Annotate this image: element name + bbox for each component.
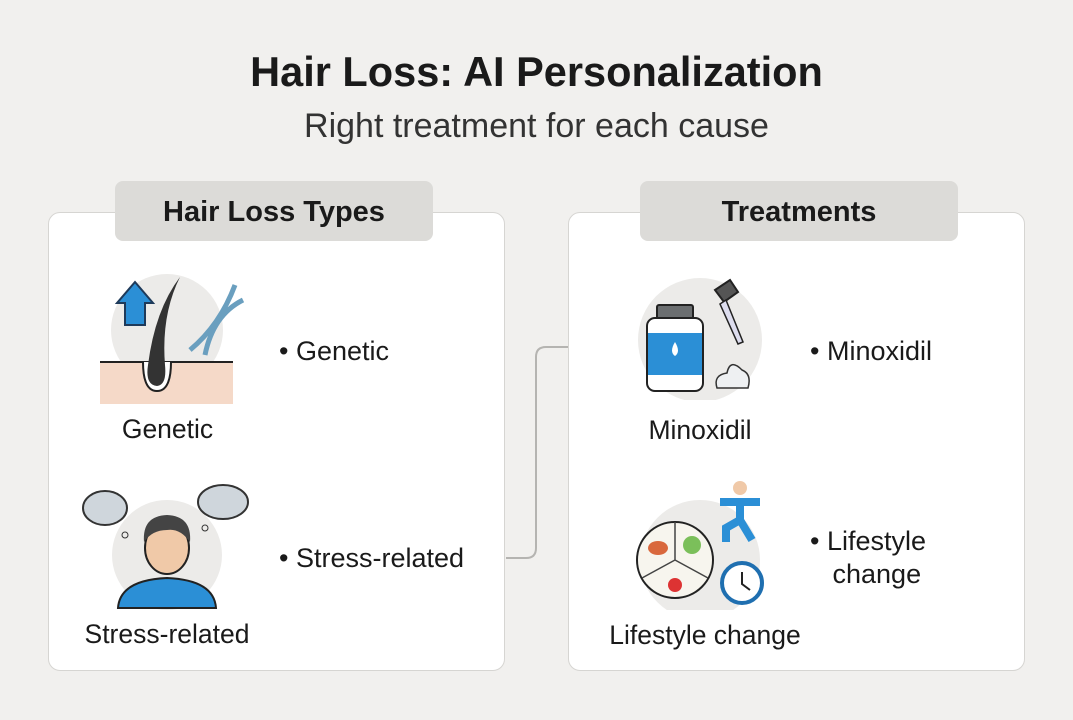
bullet: lifestyle change: • Lifestyle [810,526,926,556]
icon: stress [82,484,249,610]
connector line [506,346,568,559]
bullet: stress-related: • Stress-related [279,543,464,573]
bullet: genetic: • Genetic [279,336,389,366]
bullet: lifestyle change: change [832,559,921,589]
title: Hair Loss: AI Personalization [250,48,823,95]
heading: treatments [640,181,958,241]
icon: lifestyle [636,481,764,610]
heading: treatments: Treatments [722,196,876,228]
icon: genetic [100,274,244,404]
panel: hair loss types [48,212,505,671]
panel: treatments [568,212,1025,671]
label: genetic: Genetic [122,414,213,444]
subtitle: Right treatment for each cause [304,107,769,145]
bullet: lifestyle change [810,526,926,589]
label: lifestyle change: Lifestyle change [609,620,801,650]
bullet: minoxidil: • Minoxidil [810,336,932,366]
icon: minoxidil [638,278,762,400]
heading: hair loss types [115,181,433,241]
label: stress-related: Stress-related [85,619,249,649]
heading: hair loss types: Hair Loss Types [163,196,385,228]
label: minoxidil: Minoxidil [648,415,752,445]
